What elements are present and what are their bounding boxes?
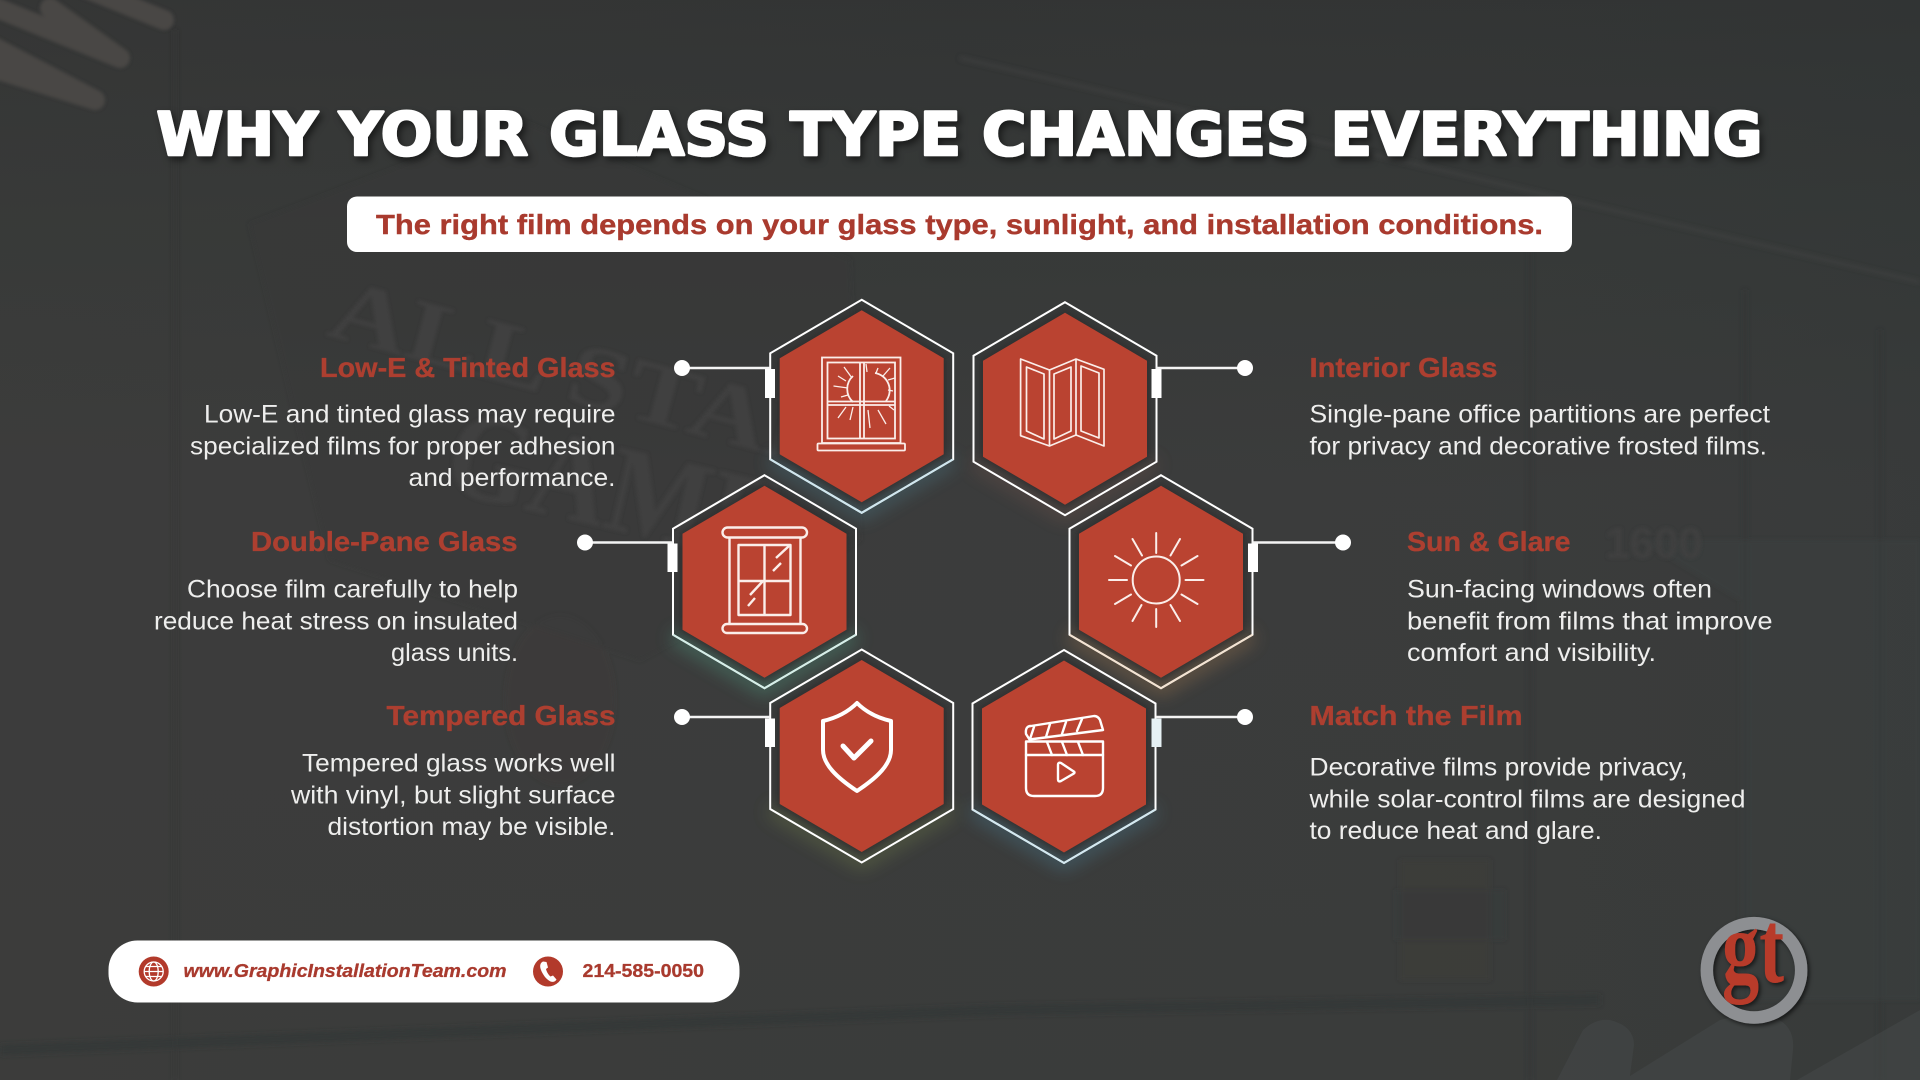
icon: folding screen xyxy=(1021,359,1104,446)
icon: globe xyxy=(139,956,169,986)
icon: shield with check xyxy=(823,703,891,791)
phone number: 214-585-0050 xyxy=(582,960,704,981)
hexagon: Tempered Glass xyxy=(770,650,953,862)
text block: Sun & Glare: Sun & Glare xyxy=(1407,526,1570,557)
text block: Low-E & Tinted Glass: Low-E & Tinted Glass xyxy=(320,352,616,383)
title: WHY YOUR GLASS TYPE CHANGES EVERYTHING xyxy=(156,100,1762,170)
hexagon: Match the Film xyxy=(972,650,1156,863)
text block: Tempered Glass: Tempered glass works well xyxy=(302,750,616,778)
icon: phone xyxy=(533,956,563,986)
connector: Sun & Glare xyxy=(1248,534,1351,572)
logo: gt xyxy=(1722,890,1784,1006)
connector: Double-Pane Glass xyxy=(577,534,678,572)
text block: Match the Film: while solar-control films are designed xyxy=(1308,786,1746,814)
text block: Double-Pane Glass: reduce heat stress on insulated xyxy=(154,608,518,636)
background: GAME xyxy=(434,383,796,594)
text block: Double-Pane Glass: Choose film carefully to help xyxy=(187,576,518,604)
connector: Low-E & Tinted Glass xyxy=(674,360,775,398)
text block: Low-E & Tinted Glass: Low-E and tinted glass may require xyxy=(204,402,616,428)
text block: Match the Film: to reduce heat and glare. xyxy=(1310,818,1602,845)
text block: Match the Film xyxy=(1308,700,1746,845)
background: ALL STAR xyxy=(320,261,859,492)
background: 1600 xyxy=(1605,519,1703,568)
text block: Sun & Glare: Sun-facing windows often xyxy=(1407,576,1712,604)
text block: Sun & Glare: benefit from films that improve xyxy=(1407,608,1772,636)
connector: Tempered Glass xyxy=(674,709,775,747)
text block: Match the Film: Decorative films provide privacy, xyxy=(1310,754,1688,782)
text block: Sun & Glare xyxy=(1407,526,1772,667)
connector: Match the Film xyxy=(1152,709,1253,747)
text block: Double-Pane Glass: glass units. xyxy=(391,640,518,667)
text block: Sun & Glare: comfort and visibility. xyxy=(1407,640,1656,667)
contact pill xyxy=(108,940,740,1002)
text block: Low-E & Tinted Glass: specialized films for proper adhesion xyxy=(190,434,616,460)
text block: Tempered Glass xyxy=(290,700,616,841)
icon: sun xyxy=(1109,533,1204,627)
subtitle banner: The right film depends on your glass type, sunlight, and installation conditions. xyxy=(376,209,1543,240)
text block: Interior Glass xyxy=(1310,352,1770,460)
text block: Low-E & Tinted Glass xyxy=(190,352,616,492)
hexagon: Low-E & Tinted Glass xyxy=(770,300,953,513)
text block: Tempered Glass: Tempered Glass xyxy=(386,700,616,731)
hexagon: Interior Glass xyxy=(974,302,1156,515)
logo xyxy=(1707,890,1801,1018)
website: www.GraphicInstallationTeam.com xyxy=(184,960,506,981)
text block: Tempered Glass: distortion may be visible. xyxy=(328,814,616,841)
text block: Interior Glass: for privacy and decorative frosted films. xyxy=(1310,434,1767,460)
hexagon: Sun & Glare xyxy=(1070,475,1252,688)
text block: Double-Pane Glass: Double-Pane Glass xyxy=(251,526,518,557)
text block: Tempered Glass: with vinyl, but slight surface xyxy=(290,782,616,810)
text block: Low-E & Tinted Glass: and performance. xyxy=(408,465,616,492)
text block: Interior Glass: Single-pane office partitions are perfect xyxy=(1310,402,1770,428)
icon: double-pane window xyxy=(722,528,807,633)
text block: Interior Glass: Interior Glass xyxy=(1310,352,1498,383)
icon: film clapperboard xyxy=(1026,716,1103,796)
icon: window with sun xyxy=(818,358,905,450)
text block: Double-Pane Glass xyxy=(154,526,518,667)
connector: Interior Glass xyxy=(1152,360,1253,398)
subtitle banner xyxy=(347,196,1572,252)
text block: Match the Film: Match the Film xyxy=(1310,700,1522,731)
hexagon: Double-Pane Glass xyxy=(673,475,856,688)
